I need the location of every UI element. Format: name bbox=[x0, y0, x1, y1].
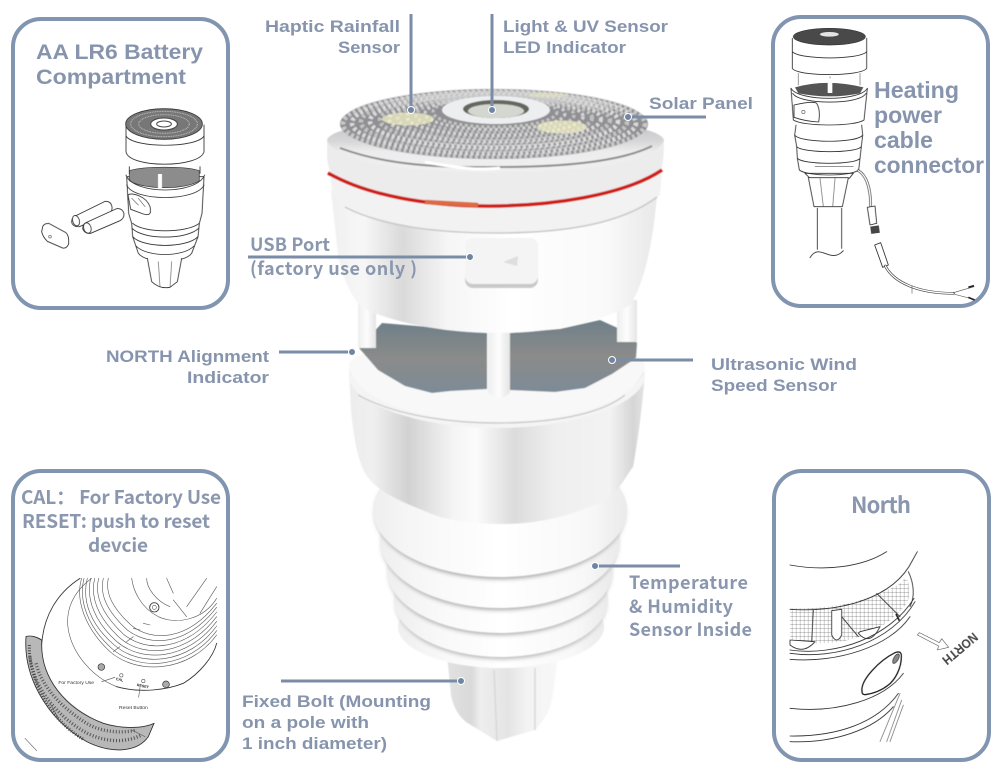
line drawing: north arrow on sensor: NORTH bbox=[939, 630, 981, 668]
LED patches bbox=[382, 112, 434, 126]
line drawing: underside of sensor bbox=[25, 578, 217, 751]
heading: CAL and RESET text: devcie bbox=[88, 531, 148, 558]
line drawing: sensor with batteries bbox=[42, 109, 205, 288]
label: Temperature and Humidity Sensor: Sensor Inside bbox=[629, 616, 752, 642]
label: Light and UV Sensor LED Indicator: Light & UV Sensor bbox=[503, 17, 668, 36]
label: NORTH Alignment Indicator: NORTH Alignment bbox=[106, 347, 269, 366]
glass rim bbox=[327, 140, 664, 207]
panel: battery compartment bbox=[13, 19, 228, 308]
label: Haptic Rainfall Sensor bbox=[265, 14, 414, 114]
heading: CAL and RESET text: RESET: push to reset bbox=[22, 507, 210, 534]
label: Solar Panel: Solar Panel bbox=[649, 94, 753, 113]
label: Light and UV Sensor LED Indicator: LED Indicator bbox=[503, 38, 626, 57]
label: Haptic Rainfall Sensor: Haptic Rainfall bbox=[265, 17, 400, 36]
heading: battery compartment: Compartment bbox=[36, 66, 186, 89]
panel: CAL and RESET buttons bbox=[13, 471, 228, 760]
heading: CAL and RESET text: CAL： For Factory Use bbox=[21, 483, 221, 510]
light sensor lens bbox=[442, 96, 550, 124]
USB port cover bbox=[465, 238, 538, 288]
label: USB Port bbox=[248, 231, 474, 281]
line drawing: underside of sensor: For Factory Use bbox=[58, 680, 94, 686]
heading: heating cable bbox=[874, 77, 984, 178]
label: Temperature and Humidity Sensor: & Humidity bbox=[629, 593, 734, 619]
heading: battery compartment: AA LR6 Battery bbox=[36, 41, 203, 64]
label: Ultrasonic Wind Speed Sensor bbox=[608, 355, 857, 395]
line drawing: underside of sensor: CAL bbox=[115, 677, 124, 683]
middle housing bbox=[349, 372, 645, 524]
red band bbox=[328, 170, 662, 206]
label: Light and UV Sensor LED Indicator bbox=[488, 14, 668, 114]
label: NORTH Alignment Indicator: Indicator bbox=[187, 368, 269, 387]
heading: CAL and RESET text bbox=[21, 483, 221, 558]
label: Temperature and Humidity Sensor: Temperature bbox=[629, 569, 748, 595]
heading: heating cable: power bbox=[874, 102, 942, 128]
panel: north alignment bbox=[774, 471, 989, 760]
label: Fixed Bolt bbox=[242, 678, 464, 753]
line drawing: underside of sensor: Reset Button bbox=[119, 705, 148, 711]
line drawing: sensor with cable bbox=[791, 28, 975, 300]
label: Fixed Bolt: Fixed Bolt (Mounting bbox=[242, 692, 431, 711]
illustration: weather sensor bbox=[327, 89, 664, 741]
label: Haptic Rainfall Sensor: Sensor bbox=[338, 38, 400, 57]
panel: heating power cable connector bbox=[773, 17, 988, 306]
heading: heating cable: cable bbox=[874, 127, 933, 153]
label: USB Port: USB Port bbox=[250, 231, 330, 257]
label: Solar Panel bbox=[624, 94, 753, 120]
solar disc with spikes bbox=[340, 89, 648, 159]
label: NORTH Alignment Indicator bbox=[106, 347, 356, 387]
ultrasonic mesh bbox=[359, 320, 637, 393]
label: Ultrasonic Wind Speed Sensor: Speed Sensor bbox=[711, 376, 837, 395]
heading: heating cable: connector bbox=[874, 152, 984, 178]
line drawing: north arrow on sensor bbox=[790, 552, 981, 742]
line drawing: underside of sensor: RESET bbox=[136, 683, 150, 690]
label: Fixed Bolt: on a pole with bbox=[242, 713, 369, 732]
upper housing bbox=[331, 190, 657, 333]
bolt base bbox=[447, 655, 558, 741]
label: USB Port: (factory use only ) bbox=[250, 255, 417, 281]
label: Ultrasonic Wind Speed Sensor: Ultrasonic Wind bbox=[711, 355, 857, 374]
label: Fixed Bolt: 1 inch diameter) bbox=[242, 734, 387, 753]
heading: North: North bbox=[851, 488, 911, 520]
heading: battery compartment bbox=[36, 41, 203, 89]
heading: heating cable: Heating bbox=[874, 77, 959, 103]
struts bbox=[358, 300, 637, 398]
radiation shield fins bbox=[373, 443, 627, 668]
label: Temperature and Humidity Sensor bbox=[592, 562, 752, 642]
